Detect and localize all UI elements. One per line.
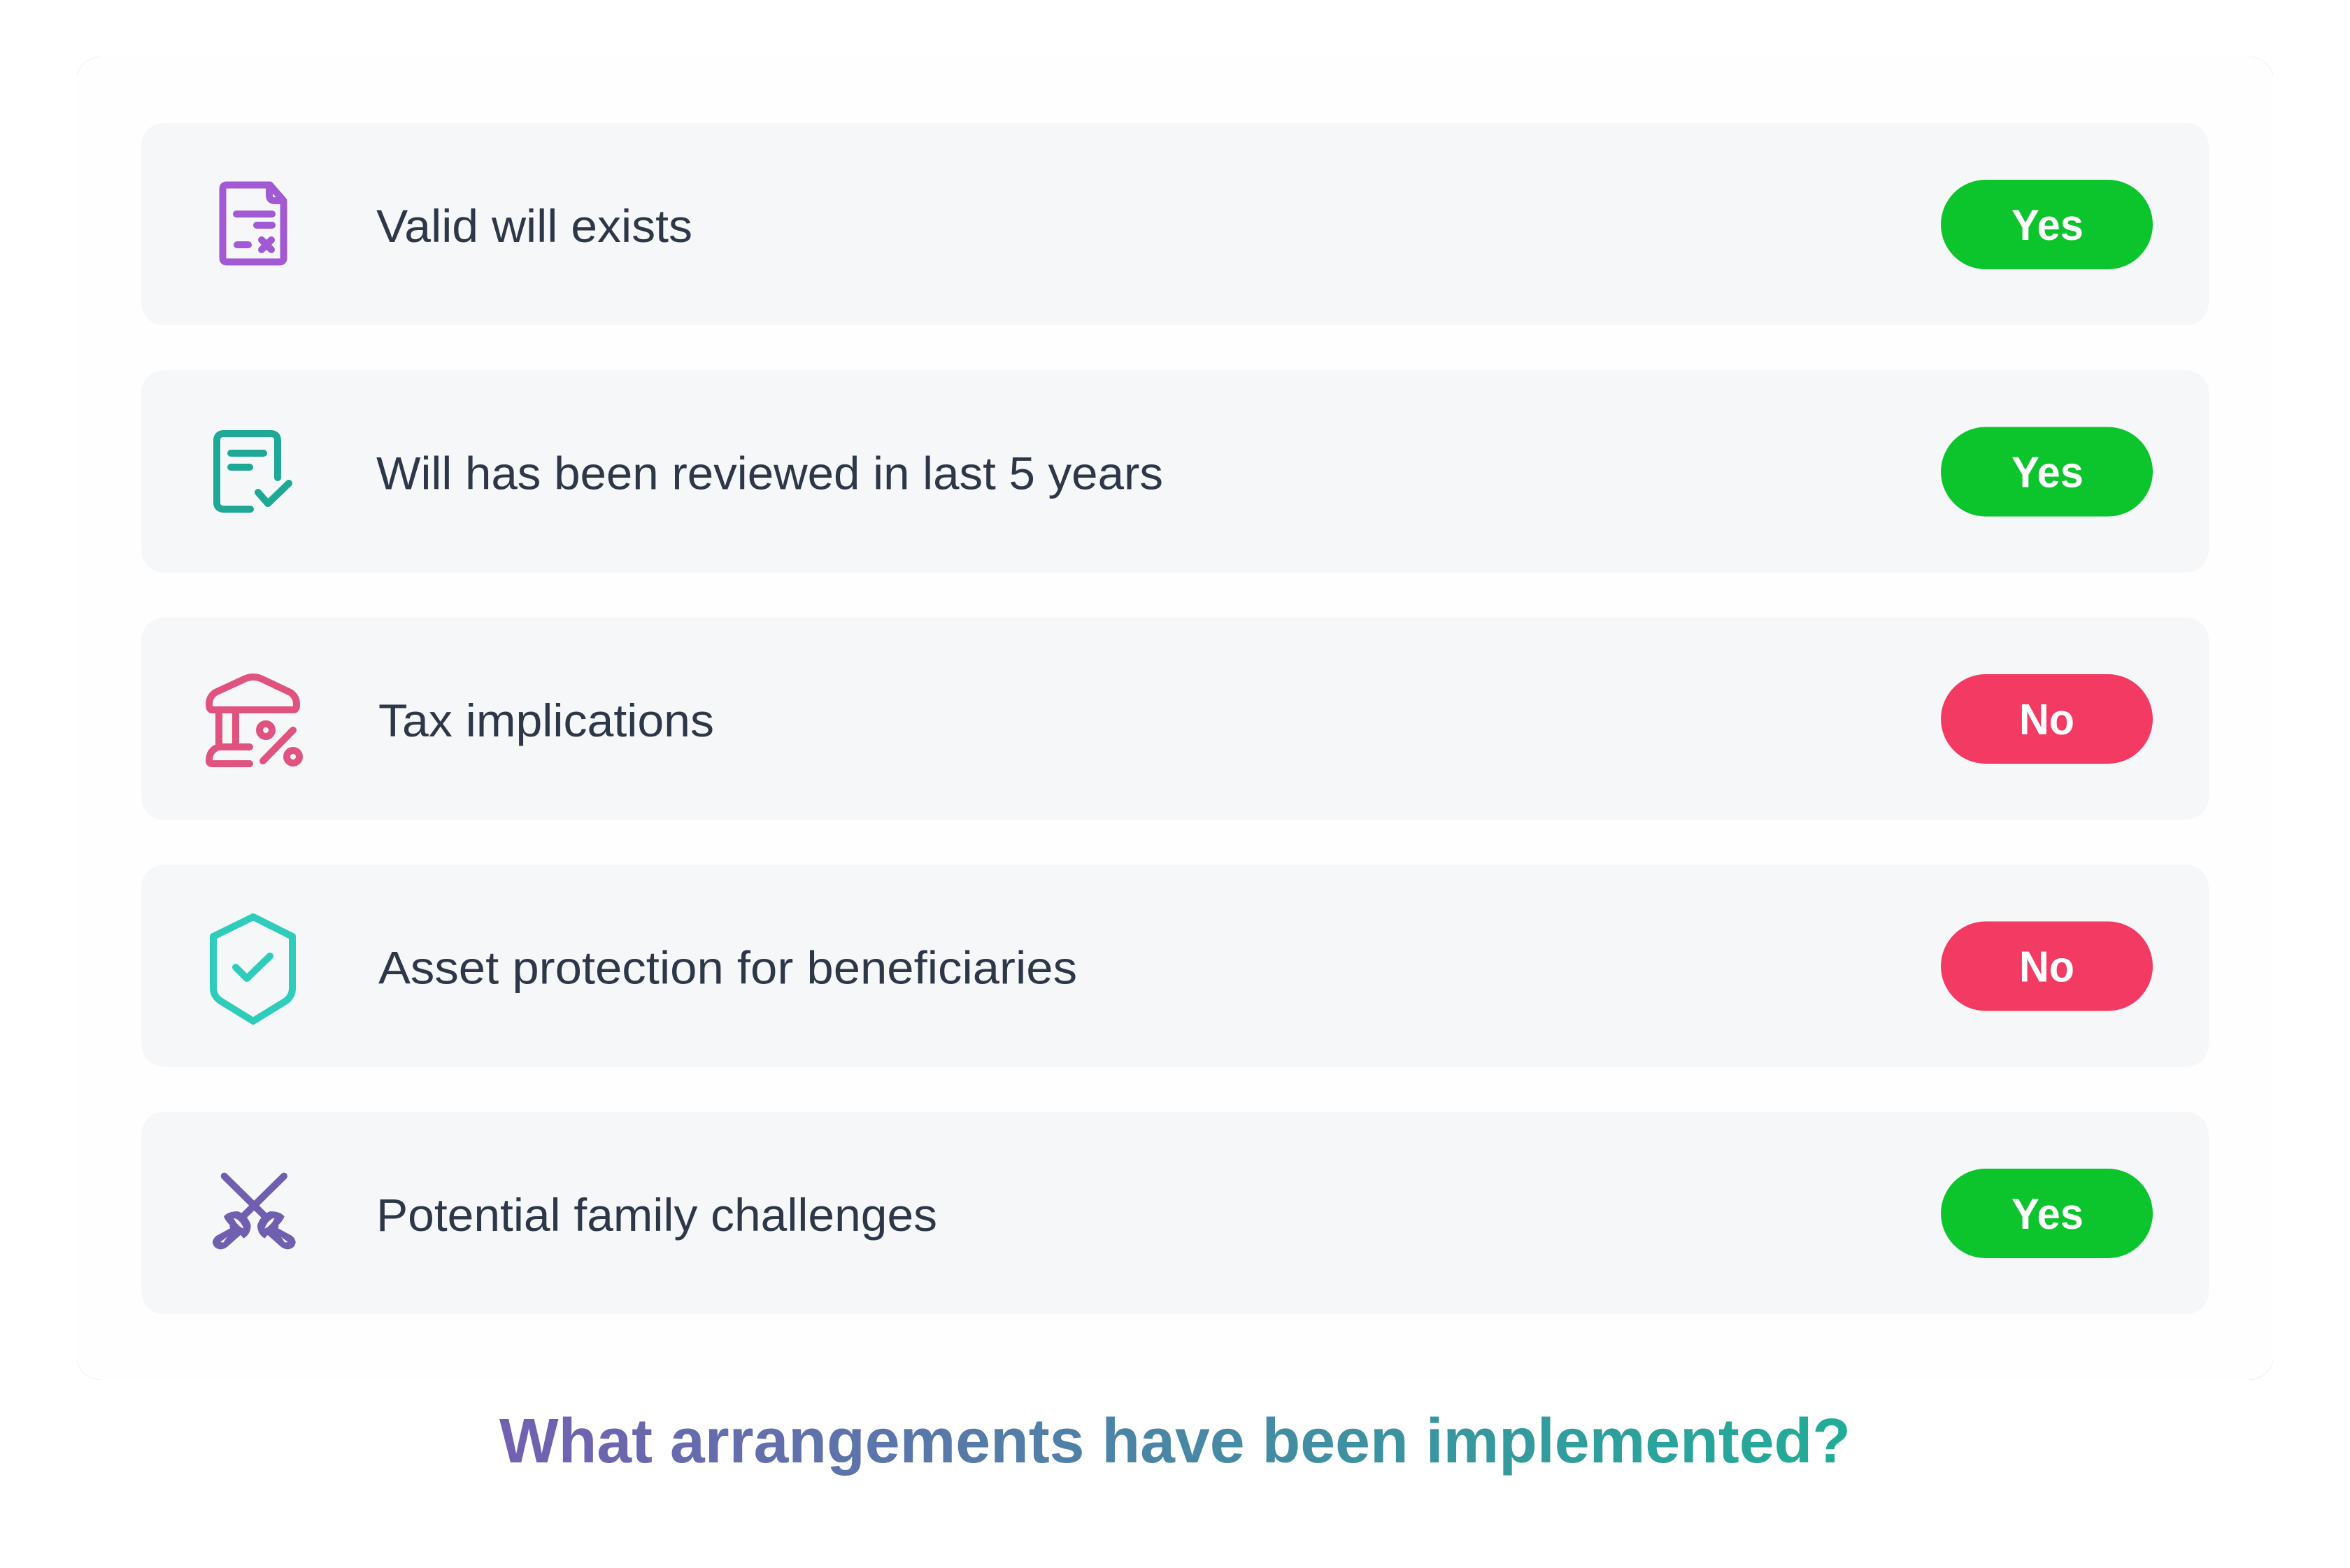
row: family challenges xyxy=(141,1112,2209,1314)
row: asset protection xyxy=(141,864,2209,1067)
row: valid will exists xyxy=(141,123,2209,325)
status pill: yes: Yes xyxy=(2011,1190,2084,1239)
card background xyxy=(141,618,2209,820)
status pill: yes: Yes xyxy=(2011,201,2084,250)
title: What arrangements have been implemented? xyxy=(499,1406,1851,1476)
row: will reviewed xyxy=(141,371,2209,572)
label: Valid will exists xyxy=(376,200,692,252)
status pill: yes xyxy=(1941,180,2153,269)
row: tax implications xyxy=(141,618,2209,820)
status pill: yes: Yes xyxy=(2011,449,2084,497)
label: Tax implications xyxy=(378,694,714,746)
card background xyxy=(141,864,2209,1067)
status pill: no: No xyxy=(2019,696,2074,744)
icon: shield with check xyxy=(213,917,292,1021)
status pill: no xyxy=(1941,922,2153,1011)
label: Potential family challenges xyxy=(376,1189,937,1241)
card background xyxy=(141,1112,2209,1314)
card background xyxy=(141,371,2209,572)
status pill: no: No xyxy=(2019,943,2074,992)
card background xyxy=(141,123,2209,325)
icon: document with cross xyxy=(222,185,284,262)
icon: bank with percent xyxy=(209,677,299,764)
icon: crossed swords xyxy=(213,1176,296,1249)
label: Will has been reviewed in last 5 years xyxy=(376,448,1163,499)
status pill: no xyxy=(1941,674,2153,764)
status pill: yes xyxy=(1941,427,2153,516)
faint background panel xyxy=(77,57,2273,1380)
label: Asset protection for beneficiaries xyxy=(378,941,1077,993)
status pill: yes xyxy=(1941,1169,2153,1258)
icon: document with check xyxy=(217,434,289,509)
